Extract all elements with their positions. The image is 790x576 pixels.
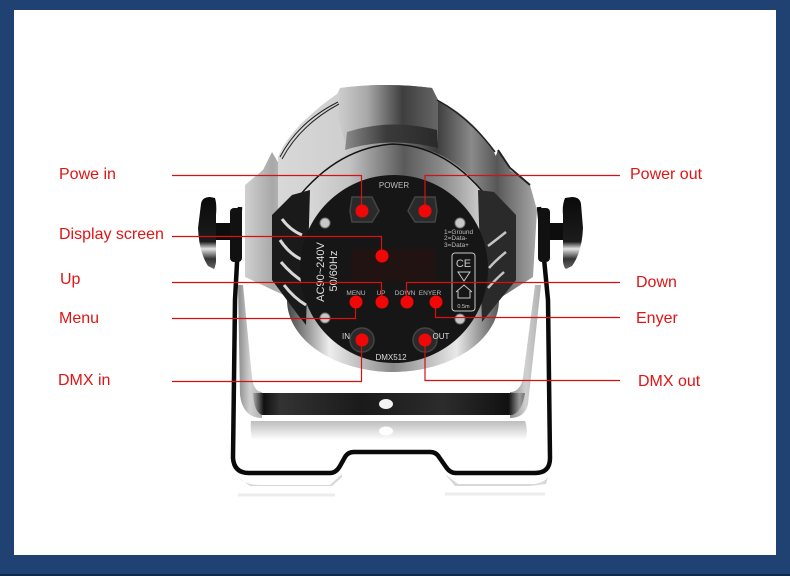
callout labels: Menu: [59, 310, 99, 327]
callout labels: DMX in: [58, 372, 110, 389]
panel labels: POWER: [379, 181, 409, 190]
bracket crossbar: [253, 393, 525, 415]
panel labels: ENYER: [419, 290, 441, 297]
panel labels: OUT: [433, 332, 450, 341]
rear housing: [278, 85, 498, 260]
display screen: [351, 249, 435, 281]
bracket right arm: [510, 285, 541, 418]
panel labels: 1=Ground: [444, 229, 473, 236]
bracket left arm: [238, 285, 262, 418]
frame reflection: [238, 474, 548, 486]
panel labels: IN: [342, 332, 350, 341]
callout labels: [58, 166, 703, 390]
U bracket wire frame: [233, 207, 550, 473]
crossbar reflection: [251, 421, 527, 440]
panel labels: UP: [376, 290, 386, 297]
callout labels: Power out: [630, 166, 703, 183]
panel labels: 2=Data-: [444, 235, 467, 242]
front dome: [283, 144, 503, 372]
housing grooves: [280, 102, 339, 159]
callout labels: Display screen: [59, 226, 164, 243]
right knob: [538, 197, 583, 269]
panel labels: AC90~240V: [315, 242, 327, 302]
panel labels: DOWN: [395, 290, 416, 297]
lamp product illustration: [198, 85, 583, 495]
panel labels: DMX512: [375, 353, 407, 362]
panel labels: 3=Data+: [444, 242, 469, 249]
screw heads: [320, 218, 465, 324]
panel labels: 50/60Hz: [328, 251, 340, 291]
certification badge: [452, 253, 475, 311]
callout labels: Enyer: [636, 310, 678, 327]
callout lines: [172, 176, 620, 382]
dark flanks and fins: [272, 190, 516, 325]
callout markers: [350, 204, 442, 346]
side wings: [245, 152, 300, 298]
callout labels: Down: [636, 274, 677, 291]
housing hump: [337, 85, 438, 142]
certification badge: CE: [456, 258, 471, 270]
connectors: [350, 197, 437, 352]
certification badge: 0.5m: [457, 304, 470, 310]
callout labels: DMX out: [638, 373, 701, 390]
rear control panel: [300, 175, 488, 363]
callout labels: Powe in: [59, 166, 116, 183]
callout labels: Up: [60, 271, 81, 288]
left knob: [198, 197, 242, 269]
panel labels: MENU: [346, 290, 366, 297]
panel labels: [315, 181, 473, 362]
